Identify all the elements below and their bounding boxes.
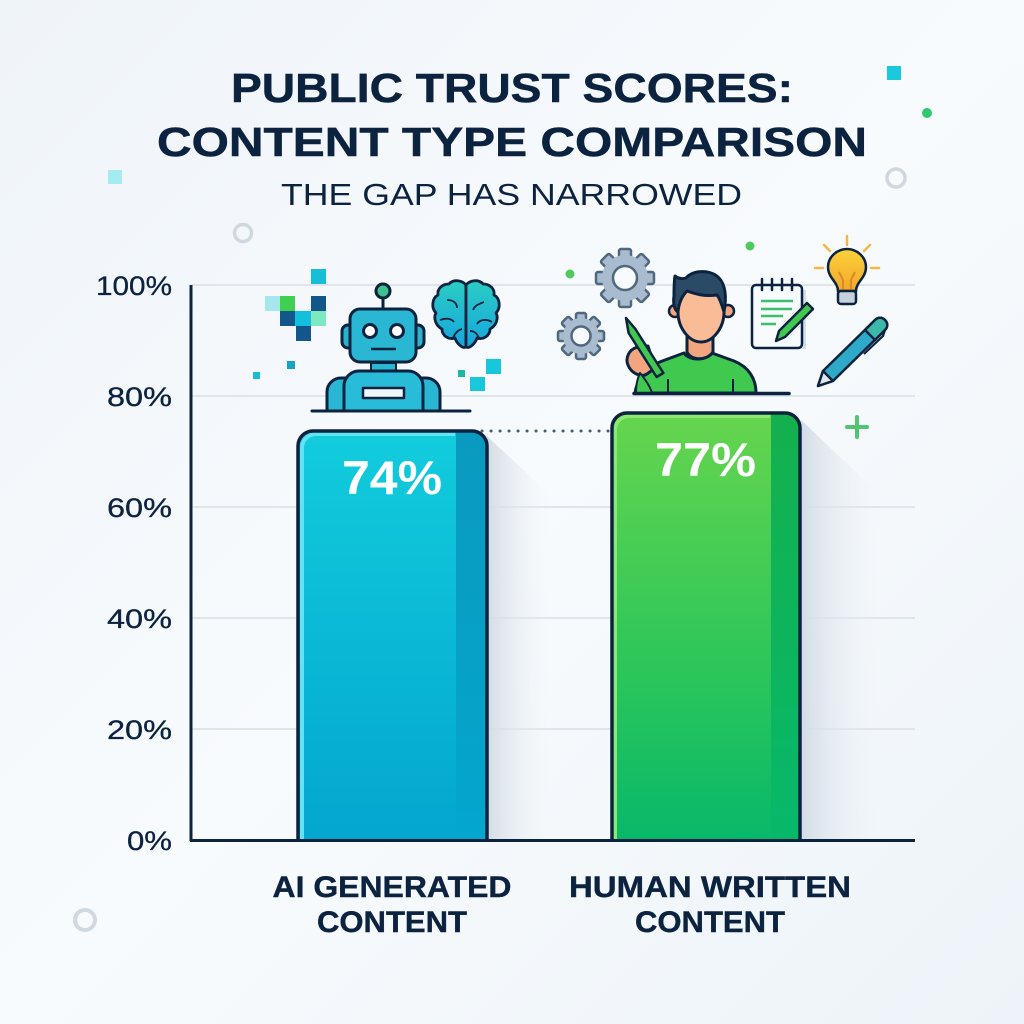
chart axes	[190, 285, 915, 841]
y axis labels: 80%	[107, 382, 172, 412]
icon: person with pen	[626, 272, 789, 394]
y axis labels	[96, 271, 172, 856]
icon: brain	[433, 281, 499, 347]
y axis labels: 40%	[107, 604, 172, 634]
subtitle: THE GAP HAS NARROWED	[281, 177, 742, 212]
dotted connector between bars	[482, 430, 608, 432]
y axis labels: 0%	[127, 826, 172, 856]
icon: plus	[847, 417, 867, 437]
bar: AI generated 74%	[298, 431, 487, 840]
icon: small gear	[558, 313, 604, 359]
title: CONTENT TYPE COMPARISON	[157, 119, 867, 165]
bar shadows	[487, 420, 880, 840]
value label: 77%	[655, 433, 756, 486]
decorative background shapes	[75, 66, 932, 930]
icon: notepad with pencil	[752, 279, 813, 349]
bar: human written 77%	[612, 413, 800, 840]
category label: human written content: HUMAN WRITTEN	[569, 871, 851, 904]
chart gridlines	[192, 285, 915, 729]
icon: pen	[818, 318, 887, 386]
icon: large gear	[596, 249, 654, 307]
category label: AI generated content	[272, 871, 512, 939]
y axis labels: 100%	[96, 271, 172, 301]
icon: light bulb	[815, 236, 879, 304]
category label: AI generated content: CONTENT	[317, 906, 467, 939]
category label: AI generated content: AI GENERATED	[272, 871, 512, 904]
title: PUBLIC TRUST SCORES:	[231, 65, 793, 111]
icon: pixel cluster left	[253, 269, 326, 379]
icon: pixel cluster right	[458, 359, 501, 391]
y axis labels: 60%	[107, 493, 172, 523]
category label: human written content	[569, 871, 851, 939]
category label: human written content: CONTENT	[635, 906, 785, 939]
y axis labels: 20%	[107, 715, 172, 745]
value label: 74%	[342, 451, 442, 504]
icon: robot	[312, 284, 470, 411]
title	[157, 65, 867, 165]
